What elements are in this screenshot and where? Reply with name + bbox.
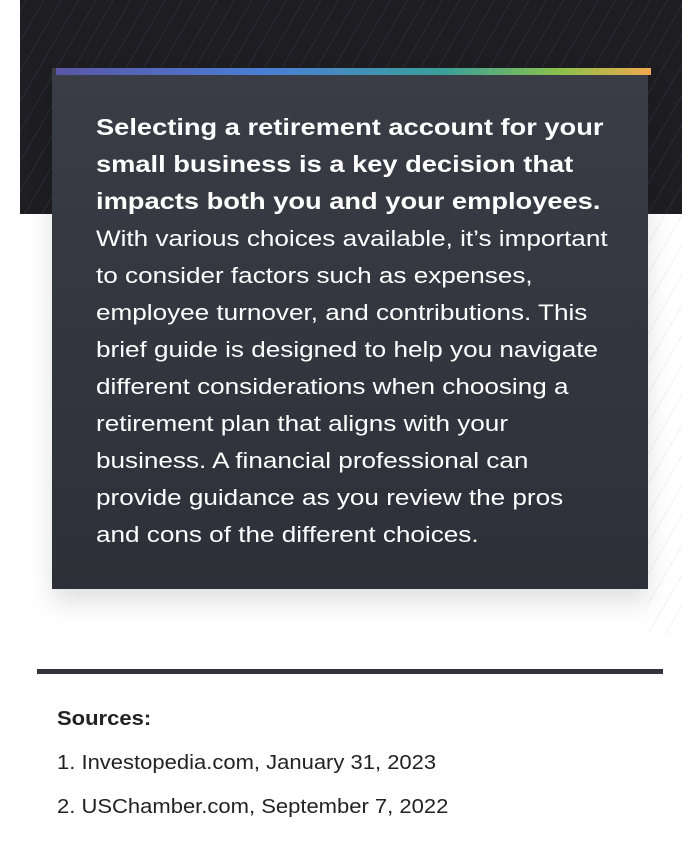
divider bbox=[37, 669, 663, 674]
light stripe pattern right bbox=[647, 214, 682, 634]
intro text: brief guide is designed to help you navigate bbox=[96, 337, 598, 362]
intro text: employee turnover, and contributions. This bbox=[96, 300, 587, 325]
intro text: small business is a key decision that bbox=[96, 151, 573, 177]
sources: 1. Investopedia.com, January 31, 2023 bbox=[57, 752, 436, 774]
intro text: With various choices available, it’s important bbox=[96, 226, 608, 251]
dark header background bbox=[20, 0, 682, 214]
intro text: to consider factors such as expenses, bbox=[96, 263, 533, 288]
sources: Sources: bbox=[57, 708, 151, 730]
intro text: different considerations when choosing a bbox=[96, 374, 569, 399]
gradient bar bbox=[56, 68, 651, 75]
intro text: impacts both you and your employees. bbox=[96, 188, 600, 214]
intro text bbox=[96, 114, 608, 547]
intro text: Selecting a retirement account for your bbox=[96, 114, 603, 140]
intro text: and cons of the different choices. bbox=[96, 522, 479, 547]
sources bbox=[57, 708, 448, 818]
intro text: business. A financial professional can bbox=[96, 448, 528, 473]
intro text: retirement plan that aligns with your bbox=[96, 411, 508, 436]
intro text: provide guidance as you review the pros bbox=[96, 485, 563, 510]
card bbox=[52, 68, 648, 589]
sources: 2. USChamber.com, September 7, 2022 bbox=[57, 796, 448, 818]
